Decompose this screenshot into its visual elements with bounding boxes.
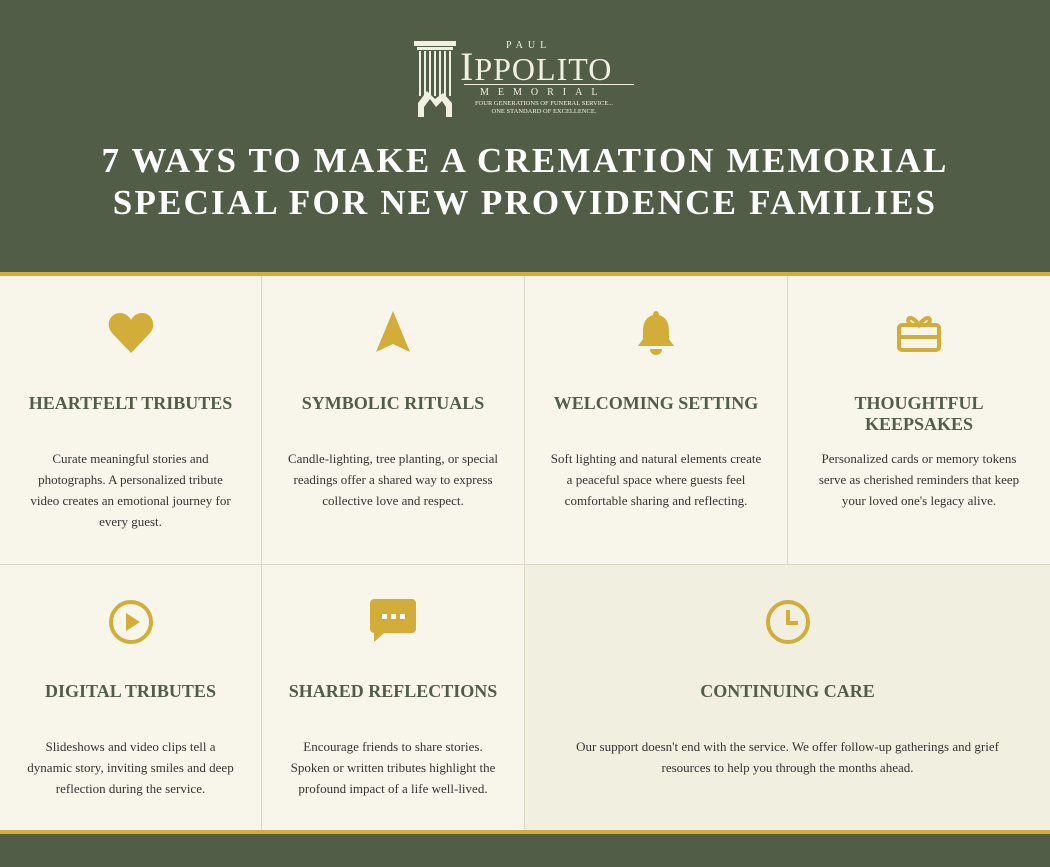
panel: continuing care: Our support doesn't end with the service. We offer follow-up gatherings and grief resources to help you through the months ahead. — [576, 739, 999, 775]
panel: shared reflections: Encourage friends to share stories. Spoken or written tributes highlight the profound impact of a life well-lived. — [291, 739, 495, 796]
panel: thoughtful keepsakes: KEEPSAKES — [865, 414, 973, 434]
panel: continuing care — [525, 565, 1050, 830]
panel: heartfelt tributes: HEARTFELT TRIBUTES — [29, 393, 232, 413]
panel: digital tributes: Slideshows and video clips tell a dynamic story, inviting smiles and deep reflection during the service. — [27, 739, 234, 796]
panel: shared reflections: SHARED REFLECTIONS — [289, 681, 497, 701]
panel: symbolic rituals — [262, 276, 525, 565]
panel: continuing care: CONTINUING CARE — [700, 681, 875, 701]
panel: heartfelt tributes — [0, 276, 262, 565]
logo: PAUL — [506, 40, 551, 51]
icon: gift card — [897, 316, 941, 352]
grid of tips — [0, 276, 1050, 830]
icon: play — [109, 600, 153, 644]
title: SPECIAL FOR NEW PROVIDENCE FAMILIES — [113, 183, 937, 222]
panel: thoughtful keepsakes: Personalized cards or memory tokens serve as cherished reminders that keep your loved one's legacy alive. — [819, 451, 1019, 508]
icon: arrow — [376, 311, 410, 352]
logo: FOUR GENERATIONS OF FUNERAL SERVICE... — [475, 100, 613, 107]
icon: clock — [766, 600, 810, 644]
title: 7 WAYS TO MAKE A CREMATION MEMORIAL — [101, 141, 949, 180]
icon: bell — [638, 311, 674, 355]
logo — [414, 40, 634, 117]
panel: welcoming setting: WELCOMING SETTING — [554, 393, 758, 413]
panel: welcoming setting: Soft lighting and natural elements create a peaceful space where guests feel comfortable sharing and reflecting. — [551, 451, 761, 508]
icon: heart — [108, 313, 154, 353]
panel: thoughtful keepsakes — [788, 276, 1050, 565]
panel: thoughtful keepsakes: THOUGHTFUL — [854, 393, 984, 413]
panel: digital tributes: DIGITAL TRIBUTES — [45, 681, 216, 701]
logo: MEMORIAL — [480, 87, 606, 98]
panel: symbolic rituals: Candle-lighting, tree planting, or special readings offer a shared way to express collective love and respect. — [288, 451, 498, 508]
title — [101, 141, 949, 222]
panel: digital tributes — [0, 565, 262, 830]
logo: ONE STANDARD OF EXCELLENCE. — [492, 108, 596, 115]
icon: column — [414, 41, 456, 117]
logo: IPPOLITO — [460, 44, 612, 89]
panel: symbolic rituals: SYMBOLIC RITUALS — [302, 393, 484, 413]
panel: shared reflections — [262, 565, 525, 830]
panel: welcoming setting — [525, 276, 788, 565]
icon: chat bubble — [370, 599, 416, 642]
header — [0, 0, 1050, 272]
panel: heartfelt tributes: Curate meaningful stories and photographs. A personalized tribute video creates an emotional journey for every guest. — [30, 451, 231, 529]
